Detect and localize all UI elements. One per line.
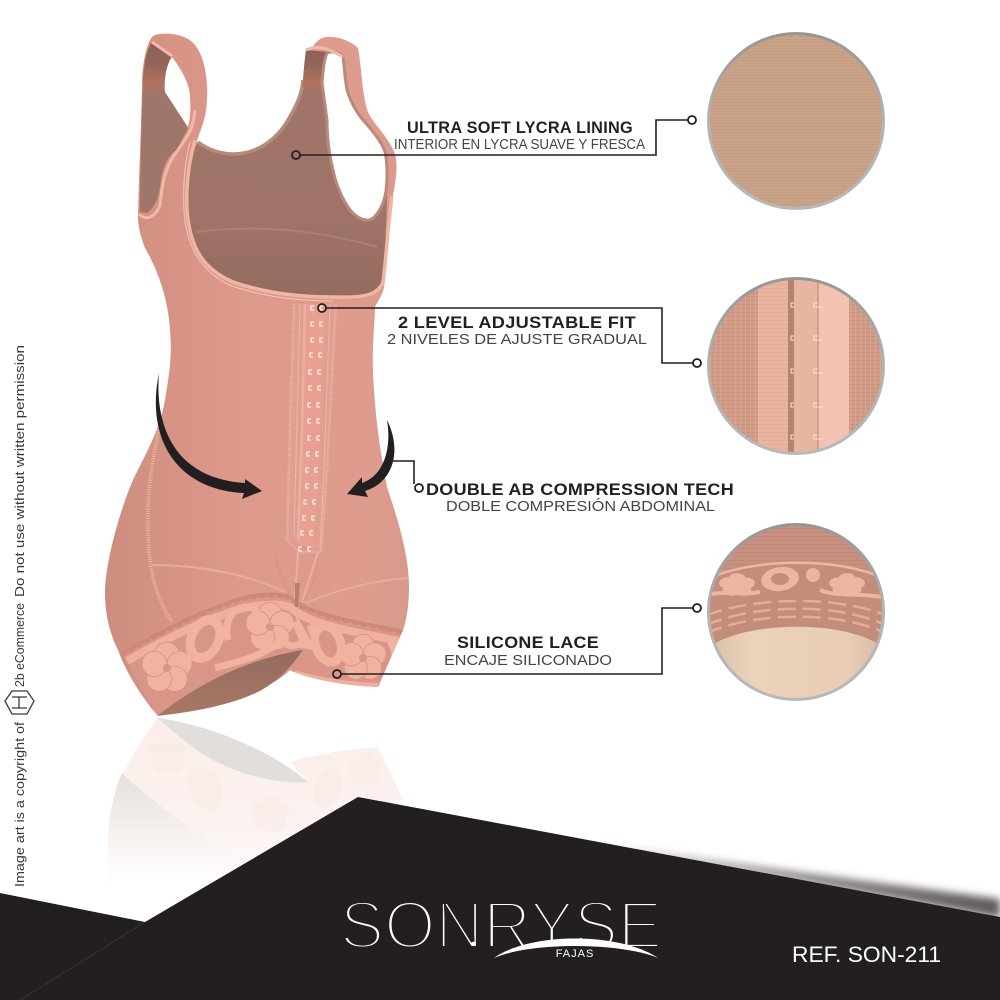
callout: silicone lace [333,604,701,678]
garment [100,34,420,730]
neck band [198,80,303,154]
callout: adjustable fit [318,304,701,367]
callout: adjustable fit: 2 NIVELES DE AJUSTE GRADUAL [387,332,647,348]
front neckline trim [187,140,392,297]
right strap band [303,50,328,88]
detail circle: lace [705,520,887,704]
callout: adjustable fit: 2 LEVEL ADJUSTABLE FIT [398,313,636,332]
callout: compression [390,461,734,515]
placket [287,304,336,602]
detail circle: hooks [705,275,887,457]
copyright note: Do not use without written permission [12,345,27,597]
crotch folds [275,555,318,603]
callout: compression: DOUBLE AB COMPRESSION TECH [426,480,734,499]
zipper tab [295,583,300,607]
inside lining [187,50,387,297]
hooks [299,306,323,551]
copyright note [5,345,34,887]
brand logo: FAJAS [556,948,594,960]
icon: 2b hexagon [5,691,34,714]
left strap cut-out [165,57,190,127]
side seam [148,423,172,622]
detail circle: lining [708,34,884,208]
left strap band [143,42,172,92]
reflection of garment [108,718,403,905]
right armhole [322,52,387,220]
lining seam [197,229,377,247]
callout: lycra lining [292,116,696,159]
copyright note: 2b eCommerce [12,603,27,687]
callout: lycra lining: ULTRA SOFT LYCRA LINING [407,118,633,137]
black footer shadow [600,845,1000,918]
arrow: right compression [347,420,394,497]
footer shape left [0,893,145,1000]
callout: compression: DOBLE COMPRESIÓN ABDOMINAL [446,498,715,515]
callout: silicone lace: SILICONE LACE [457,633,599,652]
lace band [125,592,403,715]
leg opening [157,650,303,716]
reference code: REF. SON-211 [792,942,941,967]
footer shape main [20,797,1000,1000]
hem seams [153,565,408,603]
garment silhouette [105,34,409,715]
callout: silicone lace: ENCAJE SILICONADO [444,653,612,669]
arrow: left compression [156,373,262,499]
trim stitching [184,142,333,301]
copyright note: Image art is a copyright of [12,722,27,887]
back panel lining [140,42,188,213]
strap trims [139,42,343,218]
brand logo: SONRYSE [340,888,662,963]
logo arc [494,938,658,958]
callout: lycra lining: INTERIOR EN LYCRA SUAVE Y FRESCA [394,137,645,153]
